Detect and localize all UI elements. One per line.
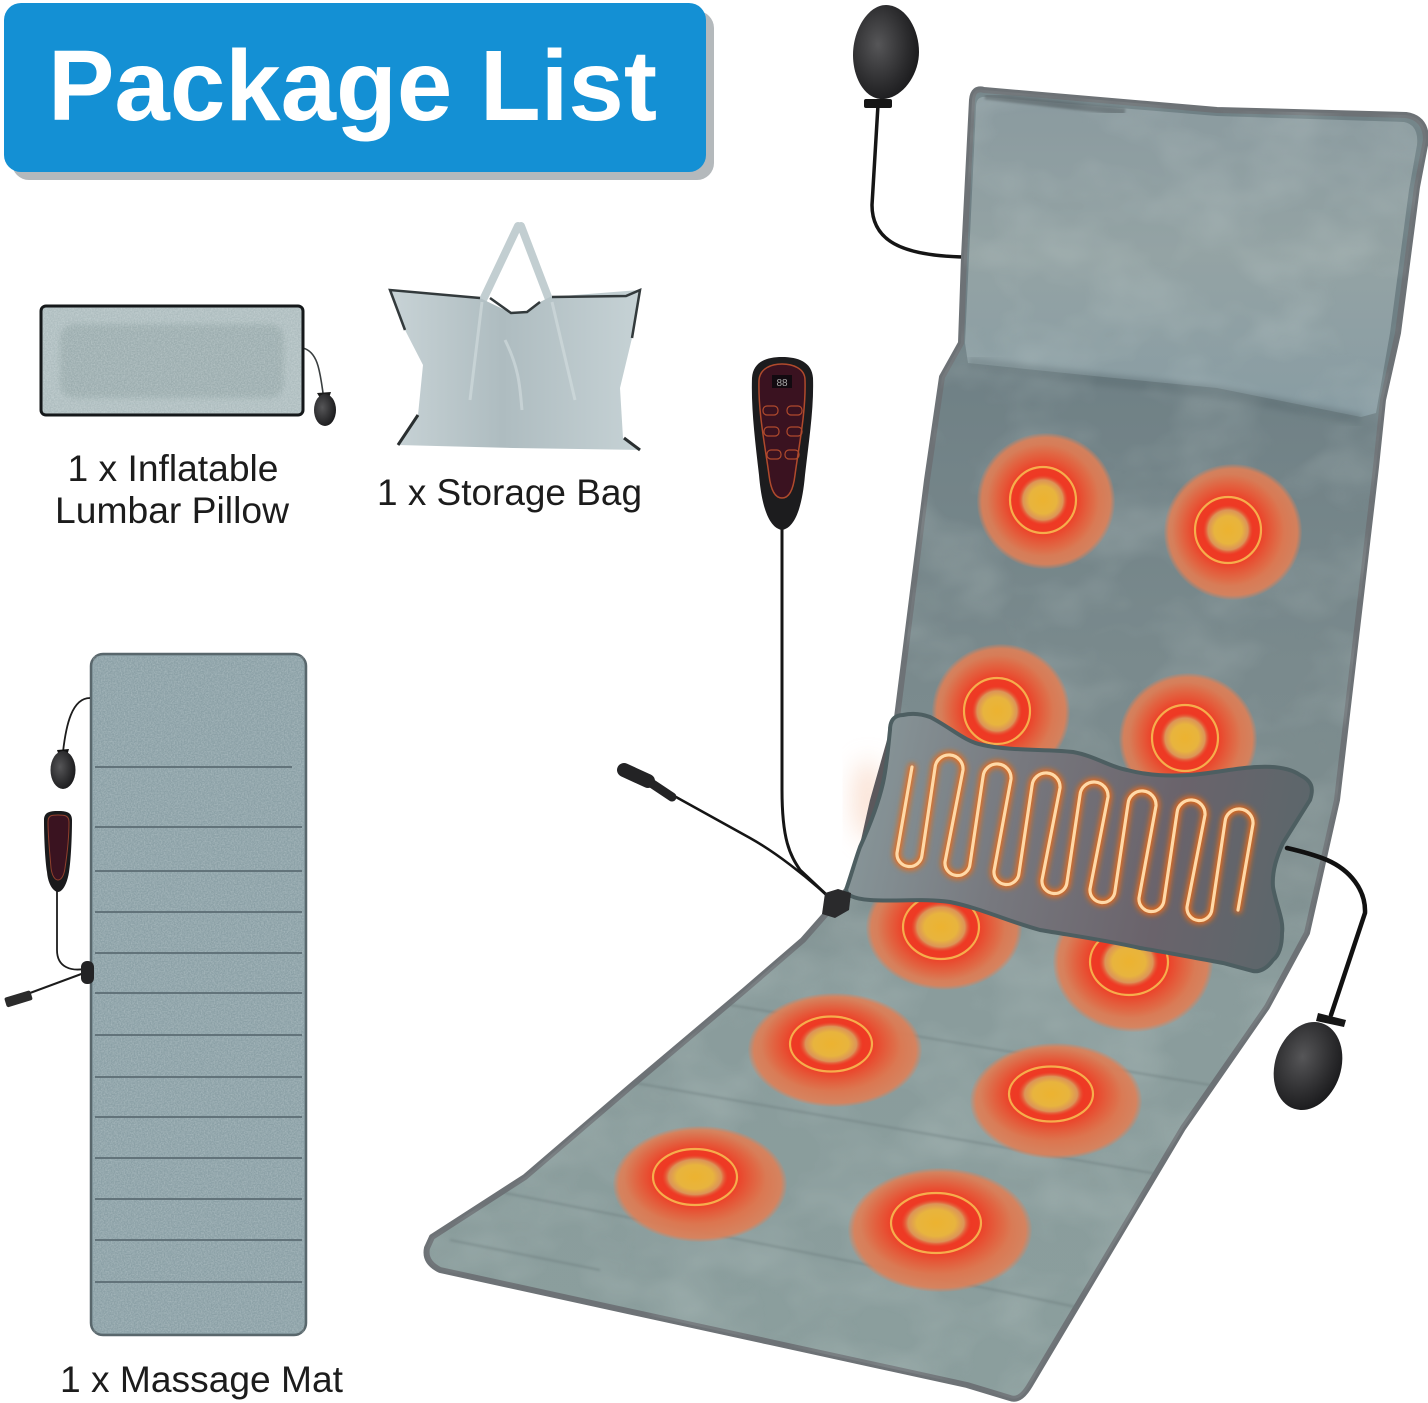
headrest <box>965 96 1417 420</box>
heating coil <box>897 755 1253 921</box>
air bulb <box>50 698 90 789</box>
air bulb: top <box>853 5 919 108</box>
label: lumbar pillow: Lumbar Pillow <box>55 490 289 531</box>
heat zone <box>970 1043 1142 1159</box>
heat zone <box>1119 673 1257 805</box>
remote control <box>752 357 813 530</box>
mat body <box>91 654 306 1335</box>
side fold <box>852 740 893 880</box>
heat zone <box>848 1168 1032 1292</box>
label: massage mat: 1 x Massage Mat <box>60 1359 344 1400</box>
remote control: 88 <box>776 378 788 389</box>
label: lumbar pillow: 1 x Inflatable <box>68 448 278 489</box>
item: inflatable lumbar pillow <box>41 306 336 426</box>
heat zones <box>613 433 1302 1292</box>
item: massage mat flat <box>4 654 306 1335</box>
quilting seams <box>450 1000 1240 1310</box>
air bulb: right <box>1263 848 1365 1119</box>
heated lumbar pillow <box>846 714 1312 971</box>
heat zone <box>1053 892 1213 1032</box>
large massage mat <box>420 85 1428 1403</box>
item: storage bag <box>390 226 640 450</box>
remote <box>4 811 94 1008</box>
heat zone <box>977 433 1115 569</box>
label: lumbar pillow <box>55 448 289 531</box>
label: storage bag: 1 x Storage Bag <box>377 472 642 513</box>
mottled plush surface <box>420 85 1428 1403</box>
cable connector <box>822 889 851 918</box>
heat zone <box>866 866 1022 990</box>
product photo: cables behind mat <box>676 105 966 900</box>
title banner <box>4 3 714 180</box>
warm glow beside mat <box>854 760 882 840</box>
title: Package List <box>48 30 657 142</box>
heat zone <box>613 1126 787 1242</box>
heat zone <box>1164 464 1302 600</box>
heat zone <box>748 993 922 1107</box>
power plug <box>624 770 672 797</box>
heat zone <box>932 644 1070 780</box>
